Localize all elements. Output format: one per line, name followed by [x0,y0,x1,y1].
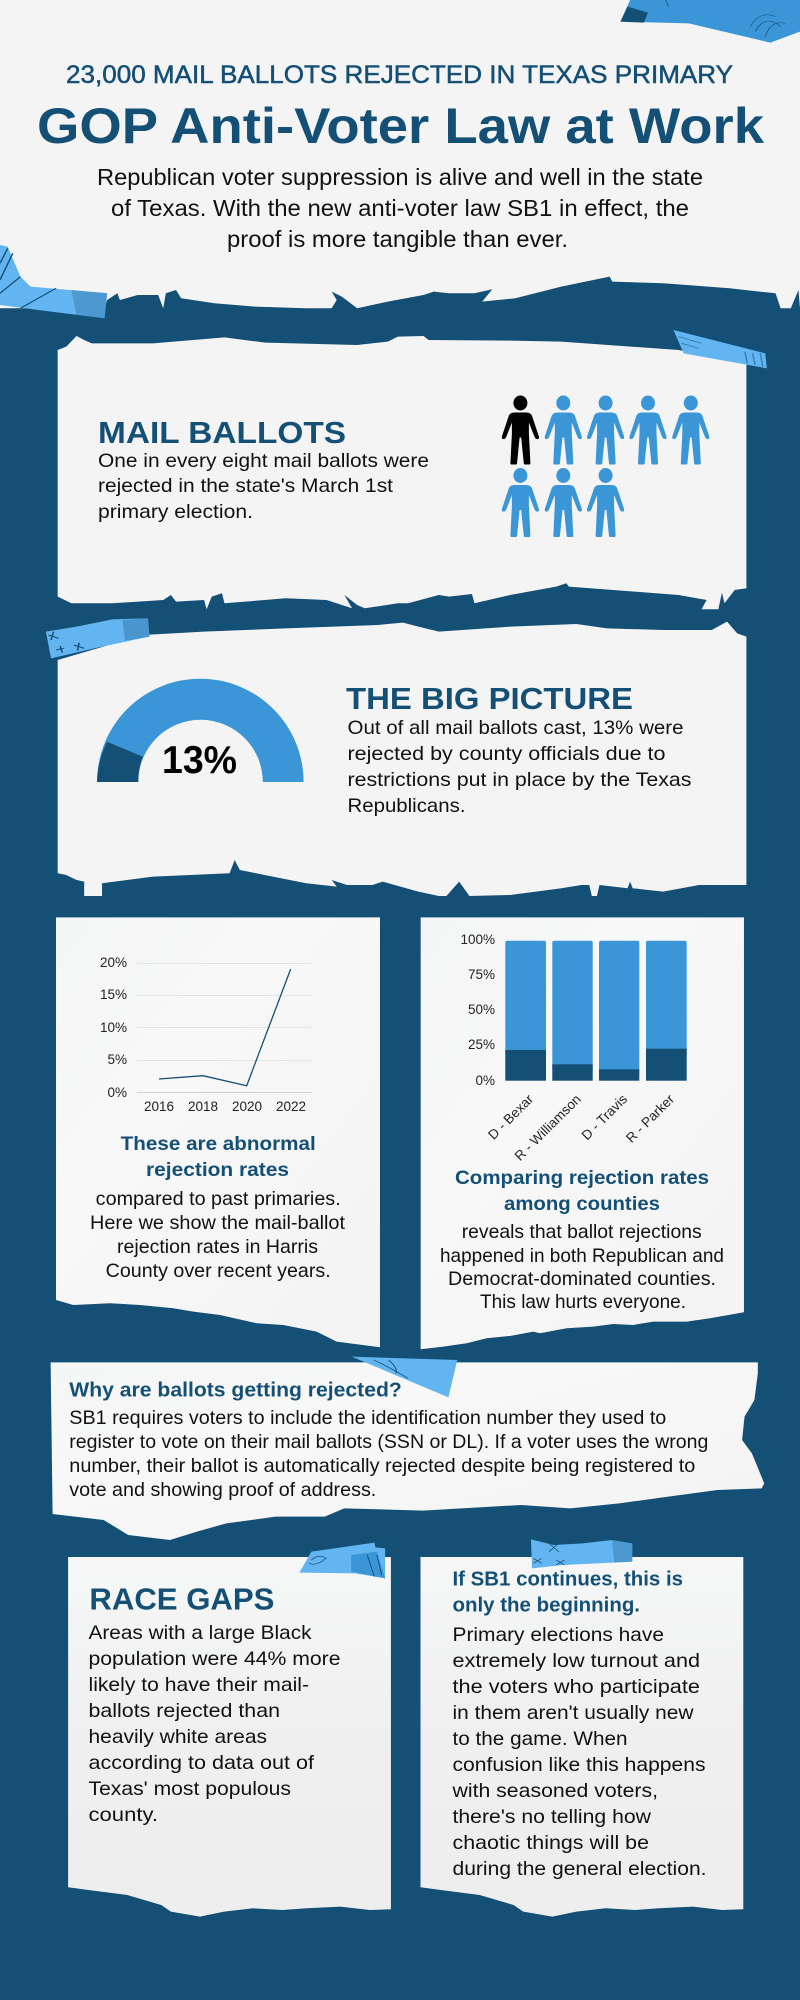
if SB1 continues text: chaotic things will be [452,1832,649,1854]
heading: the big picture: THE BIG PICTURE [346,681,633,716]
if SB1 continues text: the voters who participate [452,1676,700,1698]
if SB1 continues text: Primary elections have [452,1624,664,1646]
why ballots rejected text: number, their ballot is automatically rejected despite being registered to [69,1455,695,1477]
intro paragraph: of Texas. With the new anti-voter law SB1 in effect, the [111,195,689,221]
line chart: Harris County rejection rates: 20% [100,955,127,970]
gauge chart: 13 percent: 13% [162,739,237,782]
icon: one in eight people [502,396,709,537]
stacked bar chart: counties: D - Bexar [485,1091,536,1142]
heading: comparing counties: Comparing rejection rates [455,1167,709,1189]
if SB1 continues text: extremely low turnout and [452,1650,700,1672]
abnormal rates text: rejection rates in Harris [117,1236,318,1258]
title: GOP Anti-Voter Law at Work [37,98,764,154]
panel: the big picture [58,622,746,896]
big picture text: rejected by county officials due to [348,743,666,765]
race gaps text: Areas with a large Black [88,1622,312,1644]
race gaps text [88,1622,340,1826]
tape: header left [0,245,107,318]
tape: if SB1 continues [531,1539,632,1568]
comparing counties text: This law hurts everyone. [480,1291,686,1313]
mail ballots text [98,450,429,523]
intro paragraph: Republican voter suppression is alive and well in the state [97,164,703,190]
if SB1 continues text: in them aren't usually new [452,1702,694,1724]
heading: comparing counties [455,1167,709,1215]
comparing counties text: reveals that ballot rejections [462,1221,702,1243]
line chart: Harris County rejection rates: 2016 [144,1099,174,1114]
panel: why ballots rejected [51,1362,764,1540]
abnormal rates text: County over recent years. [106,1260,331,1282]
abnormal rates text: compared to past primaries. [96,1188,341,1210]
abnormal rates text [90,1188,346,1282]
panel: abnormal rejection rates [56,917,380,1347]
race gaps text: likely to have their mail- [88,1674,309,1696]
heading: race gaps: RACE GAPS [89,1582,274,1616]
heading: if SB1 continues [452,1569,683,1617]
line chart: Harris County rejection rates: 5% [107,1052,127,1067]
race gaps text: heavily white areas [88,1726,267,1748]
heading: comparing counties: among counties [504,1193,660,1215]
if SB1 continues text [451,1624,706,1880]
why ballots rejected text: vote and showing proof of address. [69,1479,376,1501]
stacked bar chart: counties: 100% [460,932,495,947]
why ballots rejected text: register to vote on their mail ballots (SSN or DL). If a voter uses the wrong [69,1431,708,1453]
line chart: Harris County rejection rates: 0% [107,1085,127,1100]
big picture text: restrictions put in place by the Texas [348,769,692,791]
line chart: Harris County rejection rates: 2020 [232,1099,262,1114]
stacked bar chart: counties: 50% [468,1002,495,1017]
if SB1 continues text: with seasoned voters, [451,1780,658,1802]
tape: big picture corner [46,618,149,658]
tape: header top right [620,0,800,43]
panel: mail ballots [58,336,746,609]
why ballots rejected text [69,1407,708,1501]
stacked bar chart: counties: R - Williamson [512,1092,584,1164]
heading: mail ballots: MAIL BALLOTS [98,415,346,450]
kicker: 23,000 MAIL BALLOTS REJECTED IN TEXAS PRIMARY [66,61,733,89]
race gaps text: according to data out of [88,1752,315,1774]
race gaps text: Texas' most populous [88,1778,291,1800]
stacked bar chart: counties: 25% [468,1037,495,1052]
header torn paper [0,0,800,308]
tape: mail ballots corner [673,330,767,368]
stacked bar chart: counties: 0% [475,1073,495,1088]
line chart: Harris County rejection rates: 15% [100,987,127,1002]
mail ballots text: One in every eight mail ballots were [98,450,429,472]
mail ballots text: primary election. [98,501,253,523]
why ballots rejected text: SB1 requires voters to include the identification number they used to [69,1407,666,1429]
panel: if SB1 continues [420,1557,743,1917]
panel: comparing counties [421,917,744,1349]
intro paragraph [97,164,703,252]
big picture text: Republicans. [348,795,466,817]
heading: if SB1 continues: only the beginning. [452,1595,640,1617]
line chart: Harris County rejection rates: 2022 [276,1099,306,1114]
heading: abnormal rates [121,1133,316,1181]
stacked bar chart: counties [460,932,687,1164]
panel: race gaps [68,1557,391,1917]
race gaps text: county. [88,1804,158,1826]
big picture text [348,717,692,817]
heading: why ballots rejected: Why are ballots getting rejected? [69,1380,402,1402]
line chart: Harris County rejection rates: 10% [100,1020,127,1035]
line chart: Harris County rejection rates [100,955,312,1114]
comparing counties text [440,1221,724,1313]
intro paragraph: proof is more tangible than ever. [227,226,568,252]
heading: abnormal rates: These are abnormal [121,1133,316,1155]
tape: why ballots rejected [352,1357,457,1397]
comparing counties text: happened in both Republican and [440,1245,724,1267]
if SB1 continues text: to the game. When [452,1728,628,1750]
tape: race gaps [299,1543,385,1578]
race gaps text: population were 44% more [88,1648,340,1670]
stacked bar chart: counties: 75% [468,967,495,982]
gauge chart: 13 percent [97,679,304,782]
heading: abnormal rates: rejection rates [146,1159,289,1181]
if SB1 continues text: during the general election. [452,1858,706,1880]
mail ballots text: rejected in the state's March 1st [98,475,394,497]
stacked bar chart: counties: R - Parker [623,1091,677,1146]
if SB1 continues text: there's no telling how [452,1806,652,1828]
comparing counties text: Democrat-dominated counties. [448,1268,716,1290]
line chart: Harris County rejection rates: 2018 [188,1099,218,1114]
if SB1 continues text: confusion like this happens [452,1754,706,1776]
heading: if SB1 continues: If SB1 continues, this is [452,1569,683,1591]
big picture text: Out of all mail ballots cast, 13% were [348,717,684,739]
stacked bar chart: counties: D - Travis [579,1091,630,1143]
abnormal rates text: Here we show the mail-ballot [90,1212,346,1234]
race gaps text: ballots rejected than [88,1700,280,1722]
